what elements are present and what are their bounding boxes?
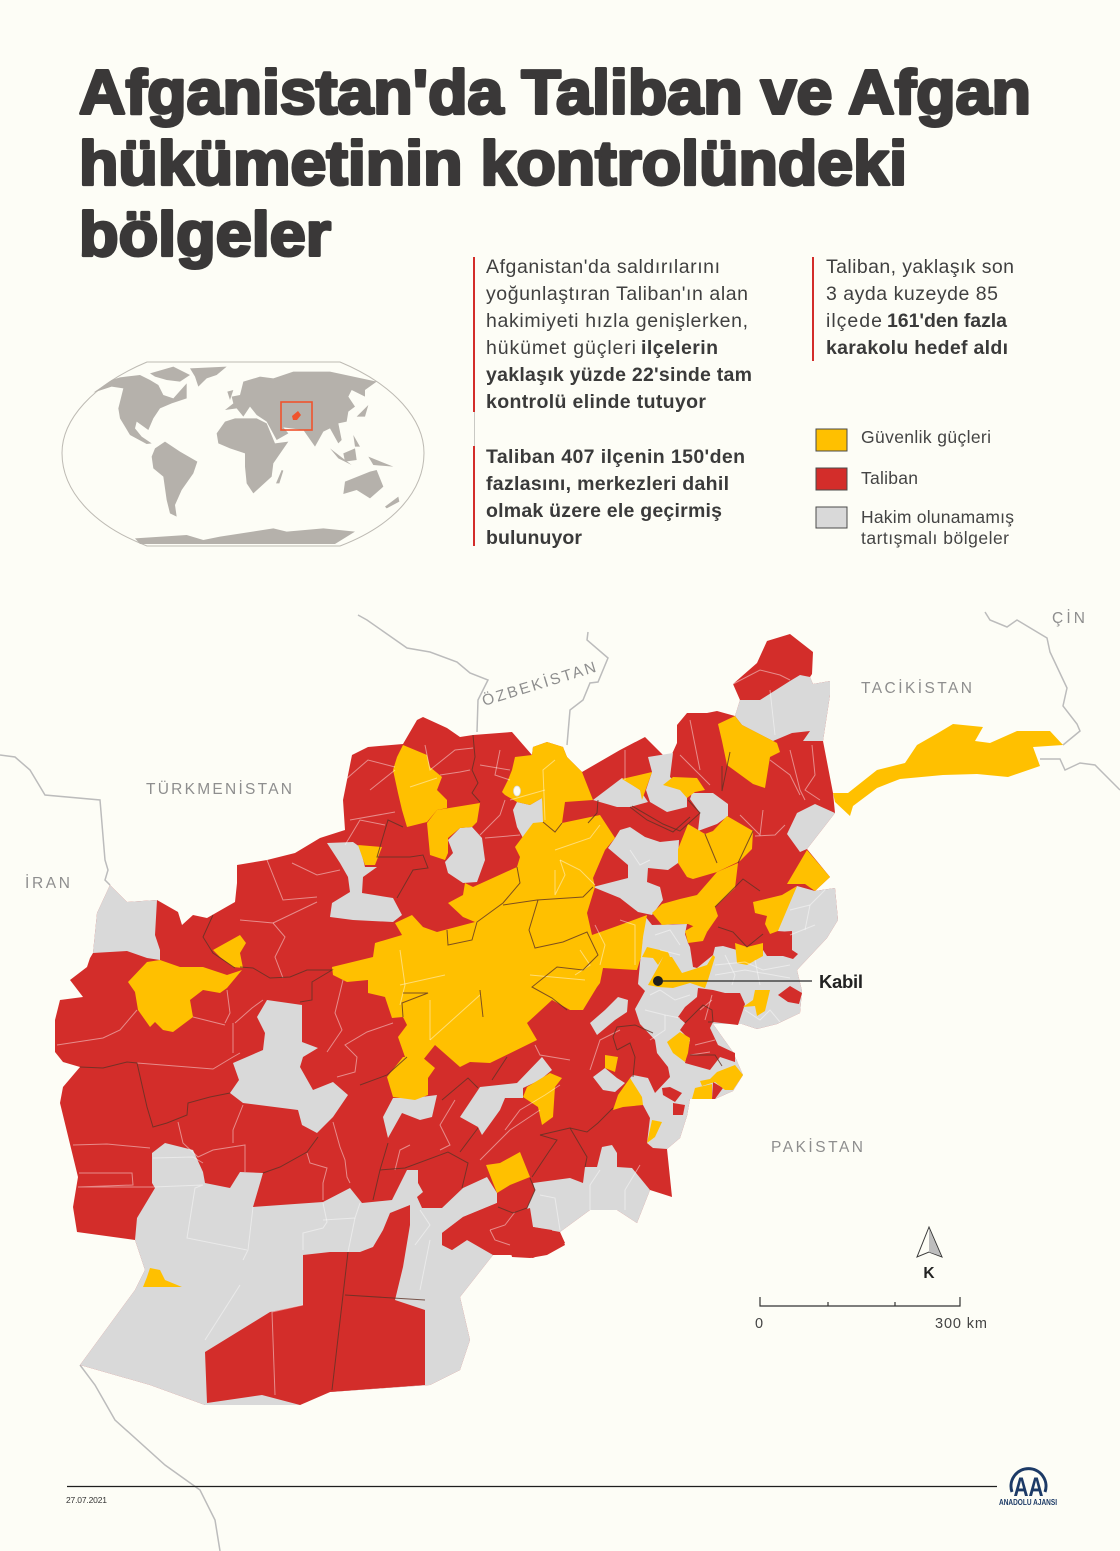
district boundaries (57, 670, 825, 1395)
country labels: PAKİSTAN (771, 1138, 863, 1156)
text block: intro: yoğunlaştıran Taliban'ın alan (486, 283, 748, 305)
map: districts by control (55, 634, 1063, 1405)
country labels: İRAN (25, 874, 70, 892)
scale bar: 300 km (935, 1316, 987, 1332)
country labels (25, 609, 1085, 1156)
Taliban areas over gray (205, 931, 802, 1405)
text block: outposts: 161'den fazla (887, 310, 1007, 332)
text block: outposts: karakolu hedef aldı (826, 337, 1008, 359)
country base in Taliban red (55, 634, 838, 1405)
north arrow (917, 1227, 942, 1282)
legend: tartışmalı bölgeler (861, 528, 1009, 548)
text block: intro: Afganistan'da saldırılarını (486, 256, 720, 278)
country labels: TÜRKMENİSTAN (146, 780, 292, 798)
text block: intro: ilçelerin (641, 337, 718, 359)
legend: Hakim olunamamış (861, 507, 1014, 527)
text block: intro: kontrolü elinde tutuyor (486, 391, 706, 413)
scale bar (755, 1297, 987, 1332)
Kabil marker and label: Kabil (819, 971, 863, 992)
scale bar: 0 (755, 1316, 763, 1332)
text block: 407 districts: bulunuyor (486, 527, 582, 549)
country labels: ÖZBEKİSTAN (480, 658, 598, 710)
country borders (0, 612, 1120, 1551)
text block: 407 districts: Taliban 407 ilçenin 150'den (486, 446, 745, 468)
lake in Balkh (514, 786, 520, 796)
title: hükümetinin kontrolündeki (79, 130, 907, 198)
text block: intro (473, 256, 752, 446)
text block: outposts (812, 256, 1014, 361)
text block: outposts: ilçede (826, 310, 882, 332)
country labels: TACİKİSTAN (861, 679, 972, 697)
locator world map (62, 362, 424, 546)
legend (816, 427, 1014, 548)
title: bölgeler (79, 200, 331, 270)
country labels: ÇİN (1052, 609, 1085, 627)
text block: 407 districts: fazlasını, merkezleri dahil (486, 473, 729, 495)
text block: intro: hakimiyeti hızla genişlerken, (486, 310, 748, 332)
text block: intro: yaklaşık yüzde 22'sinde tam (486, 364, 752, 386)
Anadolu Ajansı logo: AA (1014, 1472, 1044, 1502)
Anadolu Ajansı logo: ANADOLU AJANSI (999, 1497, 1057, 1507)
north arrow: K (923, 1265, 935, 1282)
text block: outposts: 3 ayda kuzeyde 85 (826, 283, 998, 305)
legend: Taliban (861, 468, 918, 488)
security forces areas in yellow (128, 716, 1063, 1287)
text block: outposts: Taliban, yaklaşık son (826, 256, 1014, 278)
disputed areas in gray (80, 675, 838, 1405)
Anadolu Ajansı logo (999, 1469, 1057, 1507)
Kabil marker and label (653, 971, 863, 992)
legend: Güvenlik güçleri (861, 427, 991, 447)
text block: intro: hükümet güçleri (486, 337, 636, 359)
text block: 407 districts: olmak üzere ele geçirmiş (486, 500, 722, 522)
footer rule and date: 27.07.2021 (66, 1495, 107, 1505)
text block: 407 districts (473, 446, 745, 549)
title: Afganistan'da Taliban ve Afgan (79, 58, 1031, 128)
province boundaries (80, 735, 763, 1390)
title (79, 58, 1031, 270)
